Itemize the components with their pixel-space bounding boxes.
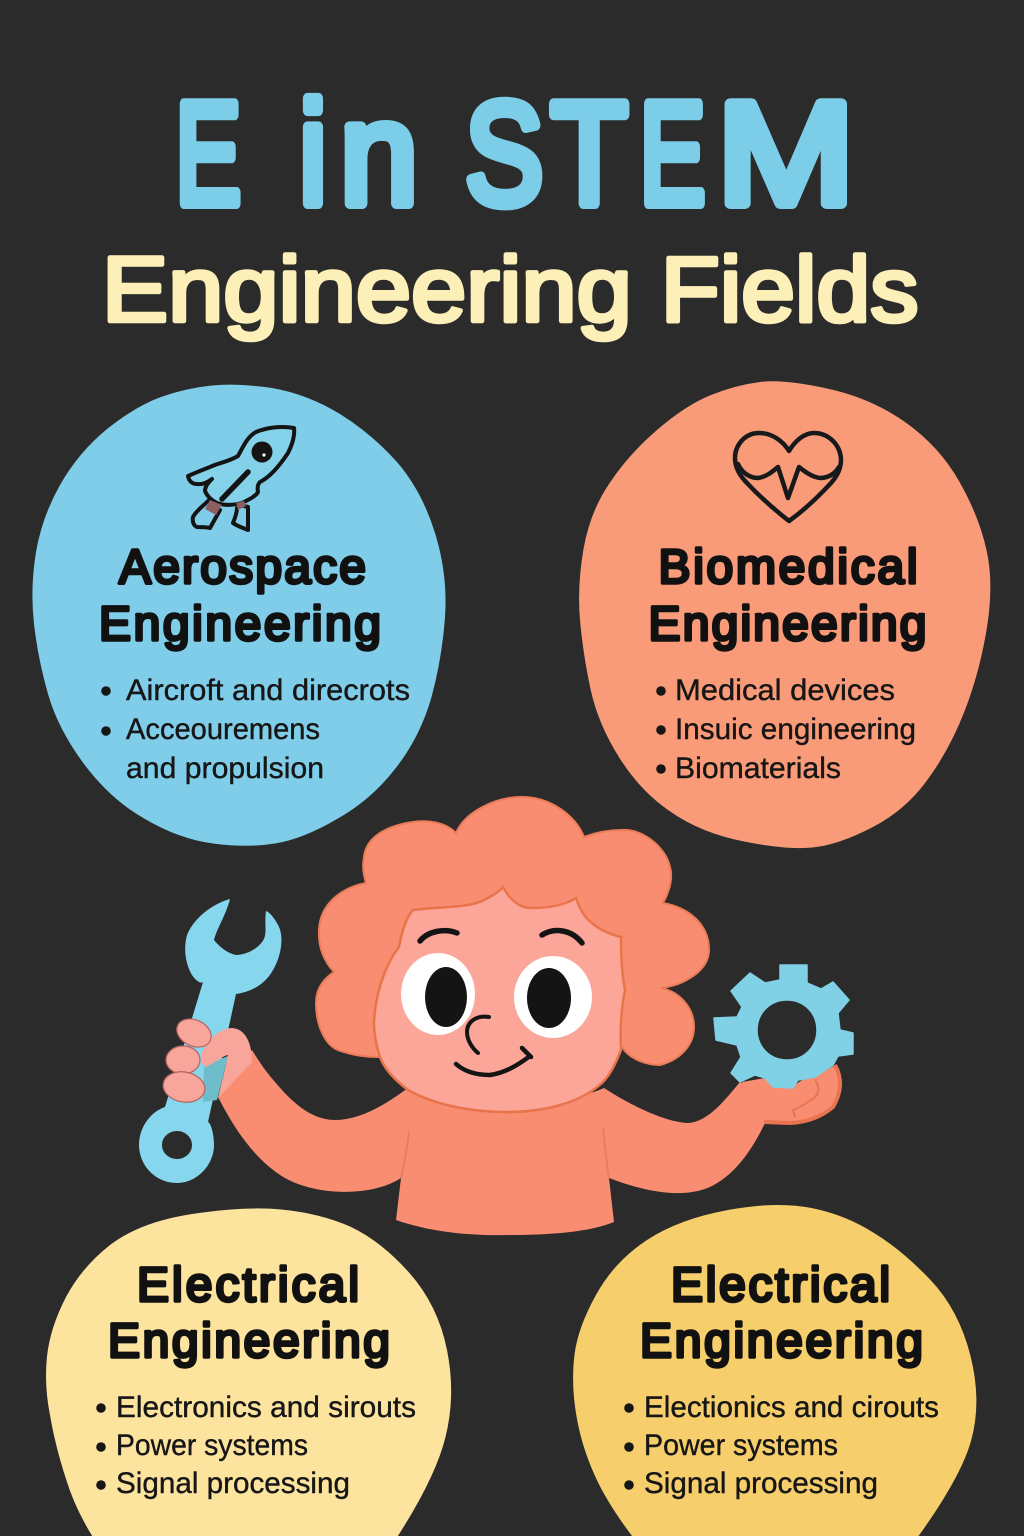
title: E xyxy=(175,72,241,234)
light yellow blob xyxy=(46,1208,451,1536)
wrench shadow in grip xyxy=(203,1056,228,1102)
aerospace blob xyxy=(32,385,446,846)
heading: electrical left xyxy=(108,1259,390,1368)
heading: electrical left: Electrical xyxy=(137,1259,359,1312)
left arm shading xyxy=(401,1132,409,1178)
list: aerospace topics: Aircroft and direcrots xyxy=(126,674,410,707)
title: S xyxy=(465,72,543,234)
smile xyxy=(456,1048,531,1075)
list: electrical left topics: Signal processing xyxy=(116,1467,350,1500)
heading: electrical left: Engineering xyxy=(108,1315,390,1368)
subtitle: Fields xyxy=(661,239,919,341)
icon: gear xyxy=(714,965,853,1088)
panel: electrical engineering left xyxy=(46,1208,451,1536)
list: aerospace topics xyxy=(101,674,410,785)
title: E xyxy=(640,72,705,234)
title: M xyxy=(717,72,854,234)
list: biomedical topics: Insuic engineering xyxy=(675,713,916,746)
list: electrical right topics: Power systems xyxy=(644,1429,838,1462)
heading: biomedical xyxy=(648,541,926,651)
heading: biomedical: Biomedical xyxy=(658,541,918,594)
list: biomedical topics: Biomaterials xyxy=(675,752,841,785)
icon: heart with pulse xyxy=(735,433,841,521)
heading: biomedical: Engineering xyxy=(648,598,926,651)
list: electrical right topics: Signal processing xyxy=(644,1467,878,1500)
list: biomedical topics xyxy=(656,674,916,785)
left hand xyxy=(161,1014,252,1105)
heading: electrical right: Electrical xyxy=(671,1259,890,1312)
rocket fin band xyxy=(236,501,246,510)
body and arms xyxy=(218,1050,790,1235)
eyes xyxy=(401,953,592,1038)
biomedical blob xyxy=(579,381,990,848)
title: i xyxy=(299,72,327,234)
dark yellow blob xyxy=(573,1205,976,1536)
icon: rocket xyxy=(188,427,294,530)
list: electrical left topics xyxy=(96,1391,416,1500)
list: electrical right topics: Electionics and cirouts xyxy=(644,1391,939,1424)
right arm shading xyxy=(603,1128,609,1178)
illustration: engineer character xyxy=(139,797,853,1235)
rocket nozzle band xyxy=(205,500,222,515)
heading: aerospace: Aerospace xyxy=(119,541,366,594)
list: electrical left topics: Electronics and sirouts xyxy=(116,1391,416,1424)
eyebrows xyxy=(420,931,582,943)
title: n xyxy=(340,72,418,234)
list: aerospace topics: Acceouremens xyxy=(126,713,320,746)
list: biomedical topics: Medical devices xyxy=(675,674,895,707)
rocket window xyxy=(252,442,272,462)
heading: aerospace: Engineering xyxy=(99,598,381,651)
list: electrical right topics xyxy=(624,1391,939,1500)
panel: aerospace engineering xyxy=(32,385,446,846)
heading: electrical right: Engineering xyxy=(640,1315,923,1368)
list: electrical left topics: Power systems xyxy=(116,1429,308,1462)
nose xyxy=(467,1017,489,1053)
list: aerospace topics: and propulsion xyxy=(126,752,324,785)
subtitle: Engineering xyxy=(102,239,632,341)
right hand xyxy=(735,1065,840,1123)
title: T xyxy=(551,72,628,234)
face xyxy=(374,887,625,1112)
heading: aerospace xyxy=(99,541,381,651)
heading: electrical right xyxy=(640,1259,923,1368)
panel: biomedical engineering xyxy=(579,381,990,848)
icon: wrench xyxy=(139,899,281,1183)
panel: electrical engineering right xyxy=(573,1205,976,1536)
hair xyxy=(316,797,709,1065)
